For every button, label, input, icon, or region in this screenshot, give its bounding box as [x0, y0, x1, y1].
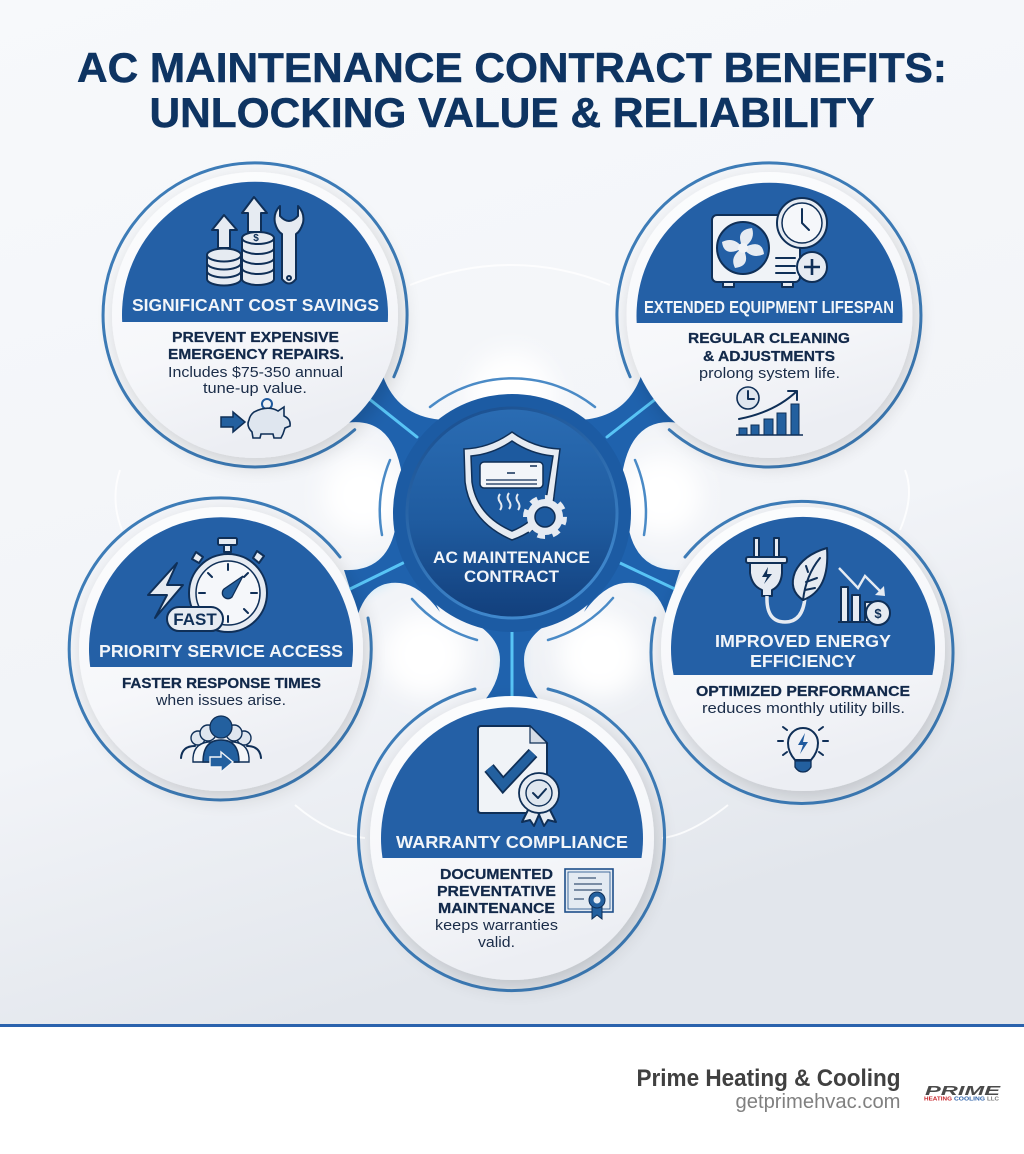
panel: improved energy efficiency [651, 501, 953, 803]
title: AC MAINTENANCE CONTRACT BENEFITS: [77, 44, 947, 91]
logo: HEATING [924, 1096, 952, 1102]
white lobes around the hub [322, 351, 702, 697]
icon: shield with AC unit and gear [464, 432, 563, 540]
panel: extended equipment lifespan: prolong system life. [699, 365, 840, 382]
logo: LLC [987, 1096, 999, 1102]
icon: coins, arrows and wrench: $ [253, 233, 259, 244]
panel: extended equipment lifespan [617, 163, 921, 467]
icon: coins, arrows and wrench [207, 197, 303, 286]
panel: priority service access: PRIORITY SERVICE ACCESS [99, 641, 343, 661]
panel: improved energy efficiency: EFFICIENCY [750, 651, 856, 671]
panel: warranty compliance: DOCUMENTED [440, 867, 553, 883]
icon: priority people group [181, 716, 261, 772]
title [77, 44, 947, 136]
panel: significant cost savings: SIGNIFICANT COST SAVINGS [132, 295, 379, 315]
website: getprimehvac.com [736, 1091, 900, 1113]
panel: improved energy efficiency: IMPROVED ENERGY [715, 631, 891, 651]
panel: warranty compliance: PREVENTATIVE [437, 884, 556, 900]
panel: extended equipment lifespan: REGULAR CLEANING [688, 331, 850, 347]
panel: priority service access: FASTER RESPONSE TIMES [122, 676, 321, 692]
panel: warranty compliance: keeps warranties [435, 917, 558, 934]
icon: document with check and seal [478, 726, 559, 826]
icon: stopwatch with bolt and FAST badge: FAST [173, 610, 217, 629]
panel: warranty compliance: valid. [478, 934, 515, 951]
panel: centre hub [393, 394, 631, 632]
panel: warranty compliance: MAINTENANCE [438, 901, 555, 917]
panel: significant cost savings: Includes $75-350 annual [168, 364, 343, 381]
panel: improved energy efficiency: OPTIMIZED PERFORMANCE [696, 684, 910, 700]
icon: outdoor AC unit with clock and plus [712, 198, 827, 287]
logo: COOLING [954, 1096, 985, 1102]
icon: clock and rising bars [736, 387, 803, 435]
centre arcs [380, 378, 646, 640]
icon: stopwatch with bolt and FAST badge [148, 538, 267, 632]
panel: priority service access [69, 498, 371, 800]
panel: warranty compliance [358, 689, 664, 991]
footer [0, 1024, 1024, 1154]
logo [924, 1083, 1001, 1102]
panel: extended equipment lifespan: EXTENDED EQUIPMENT LIFESPAN [644, 297, 894, 317]
panel: significant cost savings: EMERGENCY REPAIRS. [168, 347, 344, 363]
connector hub: arms linking centre to the five benefits [340, 376, 684, 708]
panel: centre hub: CONTRACT [464, 568, 559, 586]
panel: priority service access: when issues arise. [155, 692, 286, 709]
icon: light bulb [778, 727, 828, 772]
panel: significant cost savings [103, 163, 407, 467]
icon: arrow to piggy bank [221, 399, 290, 438]
centre label: AC MAINTENANCE [433, 549, 590, 567]
panel: warranty compliance: WARRANTY COMPLIANCE [396, 832, 628, 852]
title: UNLOCKING VALUE & RELIABILITY [150, 89, 875, 136]
panel: extended equipment lifespan: & ADJUSTMENTS [703, 349, 835, 365]
icon: certificate [565, 869, 613, 919]
icon: plug, leaf and falling bills: $ [874, 606, 882, 621]
panel: significant cost savings: tune-up value. [203, 380, 307, 397]
panel: improved energy efficiency: reduces monthly utility bills. [702, 700, 905, 717]
logo: PRIME [925, 1083, 1001, 1098]
company name: Prime Heating & Cooling [636, 1065, 900, 1092]
icon: plug, leaf and falling bills [746, 538, 890, 625]
panel: significant cost savings: PREVENT EXPENSIVE [172, 330, 339, 346]
